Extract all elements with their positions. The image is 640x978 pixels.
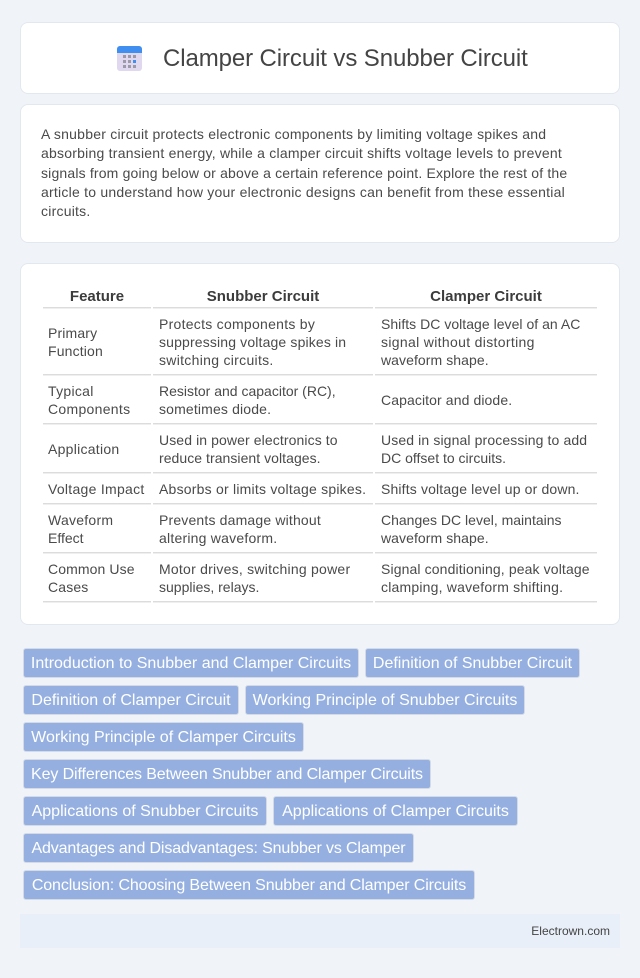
row: application: Used in power electronics to — [159, 432, 338, 448]
row: application: Used in signal processing to add — [381, 432, 587, 448]
tag — [365, 648, 580, 678]
tag: Definition of Clamper Circuit — [31, 692, 231, 709]
row: waveform effect: altering waveform. — [159, 530, 277, 546]
tag — [23, 796, 267, 826]
tag: Applications of Snubber Circuits — [32, 803, 258, 820]
tag: Conclusion: Choosing Between Snubber and Clamper Circuits — [32, 877, 466, 894]
intro text: circuits. — [41, 203, 91, 219]
row: typical components — [48, 383, 512, 417]
row: waveform effect: Changes DC level, maintains — [381, 512, 562, 528]
row: primary function: waveform shape. — [381, 352, 489, 368]
row: primary function: Primary — [48, 325, 97, 341]
intro panel — [20, 104, 620, 243]
intro text — [41, 126, 567, 219]
tag: Introduction to Snubber and Clamper Circuits — [31, 655, 351, 672]
row: primary function: Shifts DC voltage level of an AC — [381, 316, 580, 332]
tag: Working Principle of Clamper Circuits — [31, 729, 296, 746]
row: typical components: Components — [48, 401, 130, 417]
row: common use cases: Motor drives, switching power — [159, 561, 350, 577]
row: primary function: switching circuits. — [159, 352, 274, 368]
tag: Key Differences Between Snubber and Clamper Circuits — [31, 766, 423, 783]
table header: Clamper Circuit — [430, 288, 542, 305]
tag — [273, 796, 518, 826]
tag: Advantages and Disadvantages: Snubber vs Clamper — [32, 840, 405, 857]
tag — [23, 722, 304, 752]
row: voltage impact: Absorbs or limits voltage spikes. — [159, 481, 366, 497]
tag — [23, 759, 431, 789]
tag — [245, 685, 525, 715]
topic tags — [23, 648, 580, 900]
footer text: Electrown.com — [531, 924, 610, 938]
intro text: absorbing transient energy, while a clamper circuit shifts voltage levels to prevent — [41, 145, 562, 161]
row: common use cases: Common Use — [48, 561, 135, 577]
row: waveform effect: Waveform — [48, 512, 113, 528]
table header: Feature — [70, 288, 124, 305]
row: application: Application — [48, 441, 119, 457]
row: primary function: suppressing voltage spikes in — [159, 334, 346, 350]
row: common use cases: Signal conditioning, peak voltage — [381, 561, 590, 577]
panel: comparison table — [20, 263, 620, 625]
row: application — [48, 432, 587, 466]
tag — [23, 685, 239, 715]
row: typical components: Capacitor and diode. — [381, 392, 512, 408]
footer — [20, 914, 620, 948]
row: voltage impact: Voltage Impact — [48, 481, 145, 497]
tag — [23, 833, 414, 863]
tag: Definition of Snubber Circuit — [373, 655, 572, 672]
icon: calendar grid — [117, 46, 142, 71]
row: primary function — [48, 316, 580, 368]
row: waveform effect: Prevents damage without — [159, 512, 321, 528]
tag: Applications of Clamper Circuits — [282, 803, 509, 820]
row: typical components: Resistor and capacitor (RC), — [159, 383, 336, 399]
row: primary function: Function — [48, 343, 103, 359]
row: primary function: signal without distorting — [381, 334, 535, 350]
row: voltage impact: Shifts voltage level up or down. — [381, 481, 580, 497]
row: application: reduce transient voltages. — [159, 450, 321, 466]
row: waveform effect — [48, 512, 562, 546]
header card — [20, 22, 620, 94]
row: typical components: sometimes diode. — [159, 401, 271, 417]
row: primary function: Protects components by — [159, 316, 315, 332]
row: common use cases: clamping, waveform shifting. — [381, 579, 563, 595]
row: common use cases: supplies, relays. — [159, 579, 259, 595]
row: common use cases — [48, 561, 590, 595]
row: application: DC offset to circuits. — [381, 450, 506, 466]
table header: Snubber Circuit — [207, 288, 319, 305]
intro text: A snubber circuit protects electronic components by limiting voltage spikes and — [41, 126, 546, 142]
title: Clamper Circuit vs Snubber Circuit — [163, 45, 528, 72]
tag — [23, 870, 475, 900]
row: waveform effect: waveform shape. — [381, 530, 489, 546]
intro text: article to understand how your electronic designs can benefit from these essential — [41, 184, 565, 200]
row: common use cases: Cases — [48, 579, 88, 595]
row: voltage impact — [48, 481, 580, 497]
row: waveform effect: Effect — [48, 530, 84, 546]
tag: Working Principle of Snubber Circuits — [253, 692, 517, 709]
table header — [70, 288, 542, 305]
tag — [23, 648, 359, 678]
row: typical components: Typical — [48, 383, 94, 399]
intro text: signals from going below or above a certain reference point. Explore the rest of the — [41, 165, 567, 181]
